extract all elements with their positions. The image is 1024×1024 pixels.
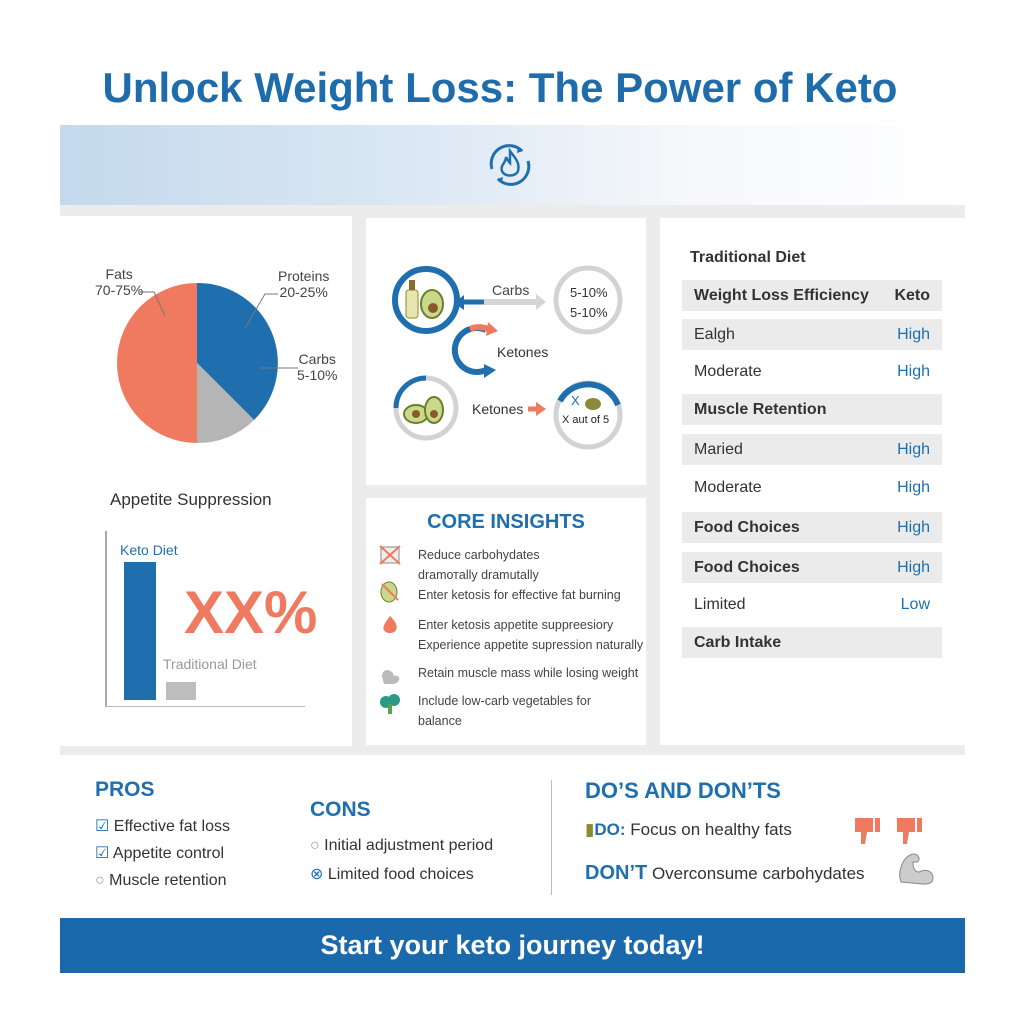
panel: ketosis diagram: X xyxy=(571,393,580,408)
text: Moderate xyxy=(694,479,762,496)
do's and don'ts xyxy=(585,778,934,884)
text: Moderate xyxy=(694,363,762,380)
footer banner xyxy=(60,918,965,973)
panel: core insights: Retain muscle mass while losing weight xyxy=(418,666,638,680)
panel: core insights: balance xyxy=(418,714,462,728)
text: High xyxy=(897,363,930,380)
panel: core insights: Enter ketosis appetite suppreesiory xyxy=(418,618,613,632)
text: Weight Loss Efficiency xyxy=(694,287,869,304)
panel: macros & appetite: 20-25% xyxy=(280,284,328,300)
bar chart: Traditional Diet xyxy=(163,656,257,672)
do's and don'ts: DO’S AND DON’TS xyxy=(585,778,781,803)
do's and don'ts: ▮DO: Focus on healthy fats xyxy=(585,820,792,839)
text: Limited xyxy=(694,596,746,613)
text: High xyxy=(897,559,930,576)
cons: ○ Initial adjustment period xyxy=(310,837,493,854)
text: Ealgh xyxy=(694,326,735,343)
icon: thumbs down xyxy=(855,818,922,844)
pros xyxy=(95,778,230,889)
panel: macros & appetite: 5-10% xyxy=(297,367,337,383)
bar chart xyxy=(105,531,305,707)
cons xyxy=(310,798,493,883)
pie labels: 70-75% xyxy=(95,282,143,298)
text: Food Choices xyxy=(694,519,800,536)
text: High xyxy=(897,441,930,458)
panel: core insights xyxy=(366,498,646,745)
text: Maried xyxy=(694,441,743,458)
pie labels xyxy=(95,266,143,298)
panel: macros & appetite xyxy=(60,216,352,746)
icon: flame cycle xyxy=(490,144,530,186)
text: Low xyxy=(901,596,930,613)
text: High xyxy=(897,326,930,343)
pros: ☑ Effective fat loss xyxy=(95,818,230,835)
panel: ketosis diagram: X aut of 5 xyxy=(562,414,609,426)
panel: ketosis diagram: Ketones xyxy=(472,401,523,417)
text: High xyxy=(897,479,930,496)
footer banner: Start your keto journey today! xyxy=(320,930,705,960)
text: High xyxy=(897,519,930,536)
panel: ketosis diagram: 5-10% xyxy=(570,285,608,300)
insight icons xyxy=(379,545,401,714)
insight texts xyxy=(418,548,621,602)
banner xyxy=(60,125,965,205)
pie chart xyxy=(117,283,298,443)
pros: ☑ Appetite control xyxy=(95,845,224,862)
pie labels: Fats xyxy=(106,266,133,282)
text: Traditional Diet xyxy=(690,249,806,266)
panel: ketosis diagram xyxy=(366,218,646,485)
text: Keto xyxy=(894,287,930,304)
appetite heading: Appetite Suppression xyxy=(110,490,272,509)
panel: core insights: Include low-carb vegetables for xyxy=(418,694,591,708)
title: Unlock Weight Loss: The Power of Keto xyxy=(103,64,897,111)
insight texts: Enter ketosis for effective fat burning xyxy=(418,588,621,602)
panel: ketosis diagram: Carbs xyxy=(492,282,529,298)
panels background xyxy=(60,205,965,755)
text: Food Choices xyxy=(694,559,800,576)
panel: core insights: Experience appetite supression naturally xyxy=(418,638,643,652)
panel: comparison table xyxy=(660,218,965,745)
table rows xyxy=(682,280,942,658)
panel: macros & appetite: Carbs xyxy=(299,351,336,367)
bar chart: Keto Diet xyxy=(120,542,178,558)
panel: ketosis diagram: 5-10% xyxy=(570,305,608,320)
pros: PROS xyxy=(95,778,155,801)
do's and don'ts: DON’T Overconsume carbohydates xyxy=(585,862,865,884)
cons: CONS xyxy=(310,798,371,821)
text: Carb Intake xyxy=(694,634,781,651)
text: Muscle Retention xyxy=(694,401,826,418)
panel: ketosis diagram: Ketones xyxy=(497,344,548,360)
pros: ○ Muscle retention xyxy=(95,872,227,889)
big stat: XX% xyxy=(184,579,317,646)
insight texts: dramотally dramutally xyxy=(418,568,539,582)
icon: muscle xyxy=(899,854,934,884)
cons: ⊗ Limited food choices xyxy=(310,866,474,883)
heading: CORE INSIGHTS xyxy=(427,511,585,533)
insight texts: Reduce carbohydates xyxy=(418,548,540,562)
panel: macros & appetite: Proteins xyxy=(278,268,329,284)
